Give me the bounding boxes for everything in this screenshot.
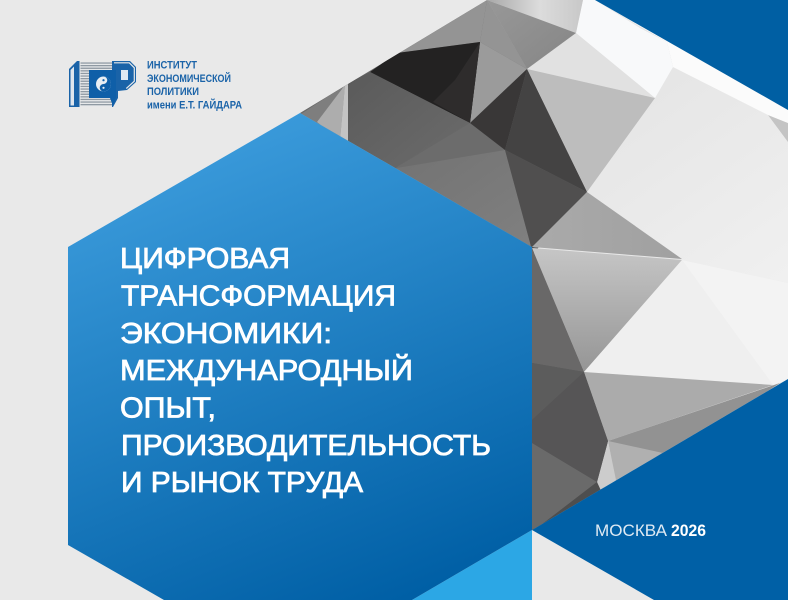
title: МЕЖДУНАРОДНЫЙ: [120, 353, 413, 387]
title: ЦИФРОВАЯ: [120, 243, 290, 275]
institute name: ЭКОНОМИЧЕСКОЙ: [147, 72, 231, 85]
title: И РЫНОК ТРУДА: [121, 467, 364, 499]
title: ОПЫТ,: [120, 392, 216, 424]
place and year: МОСКВА: [595, 522, 667, 540]
institute name: ПОЛИТИКИ: [147, 86, 199, 98]
cyan triangle accent: [412, 530, 532, 600]
institute name: [147, 59, 242, 111]
institute name: ИНСТИТУТ: [147, 59, 197, 71]
title: ТРАНСФОРМАЦИЯ: [121, 280, 396, 312]
place and year: 2026: [671, 522, 706, 540]
title: [120, 243, 491, 499]
polygonal crystal image: [295, 0, 788, 540]
logo mark: [69, 61, 136, 107]
top right dark blue corner: [595, 0, 788, 110]
title: ЭКОНОМИКИ:: [120, 318, 332, 350]
title: ПРОИЗВОДИТЕЛЬНОСТЬ: [121, 430, 491, 462]
place and year: [595, 522, 706, 540]
bottom right dark blue panel: [532, 379, 788, 600]
blue hexagon panel: [68, 113, 532, 600]
institute name: имени Е.Т. ГАЙДАРА: [147, 98, 242, 111]
